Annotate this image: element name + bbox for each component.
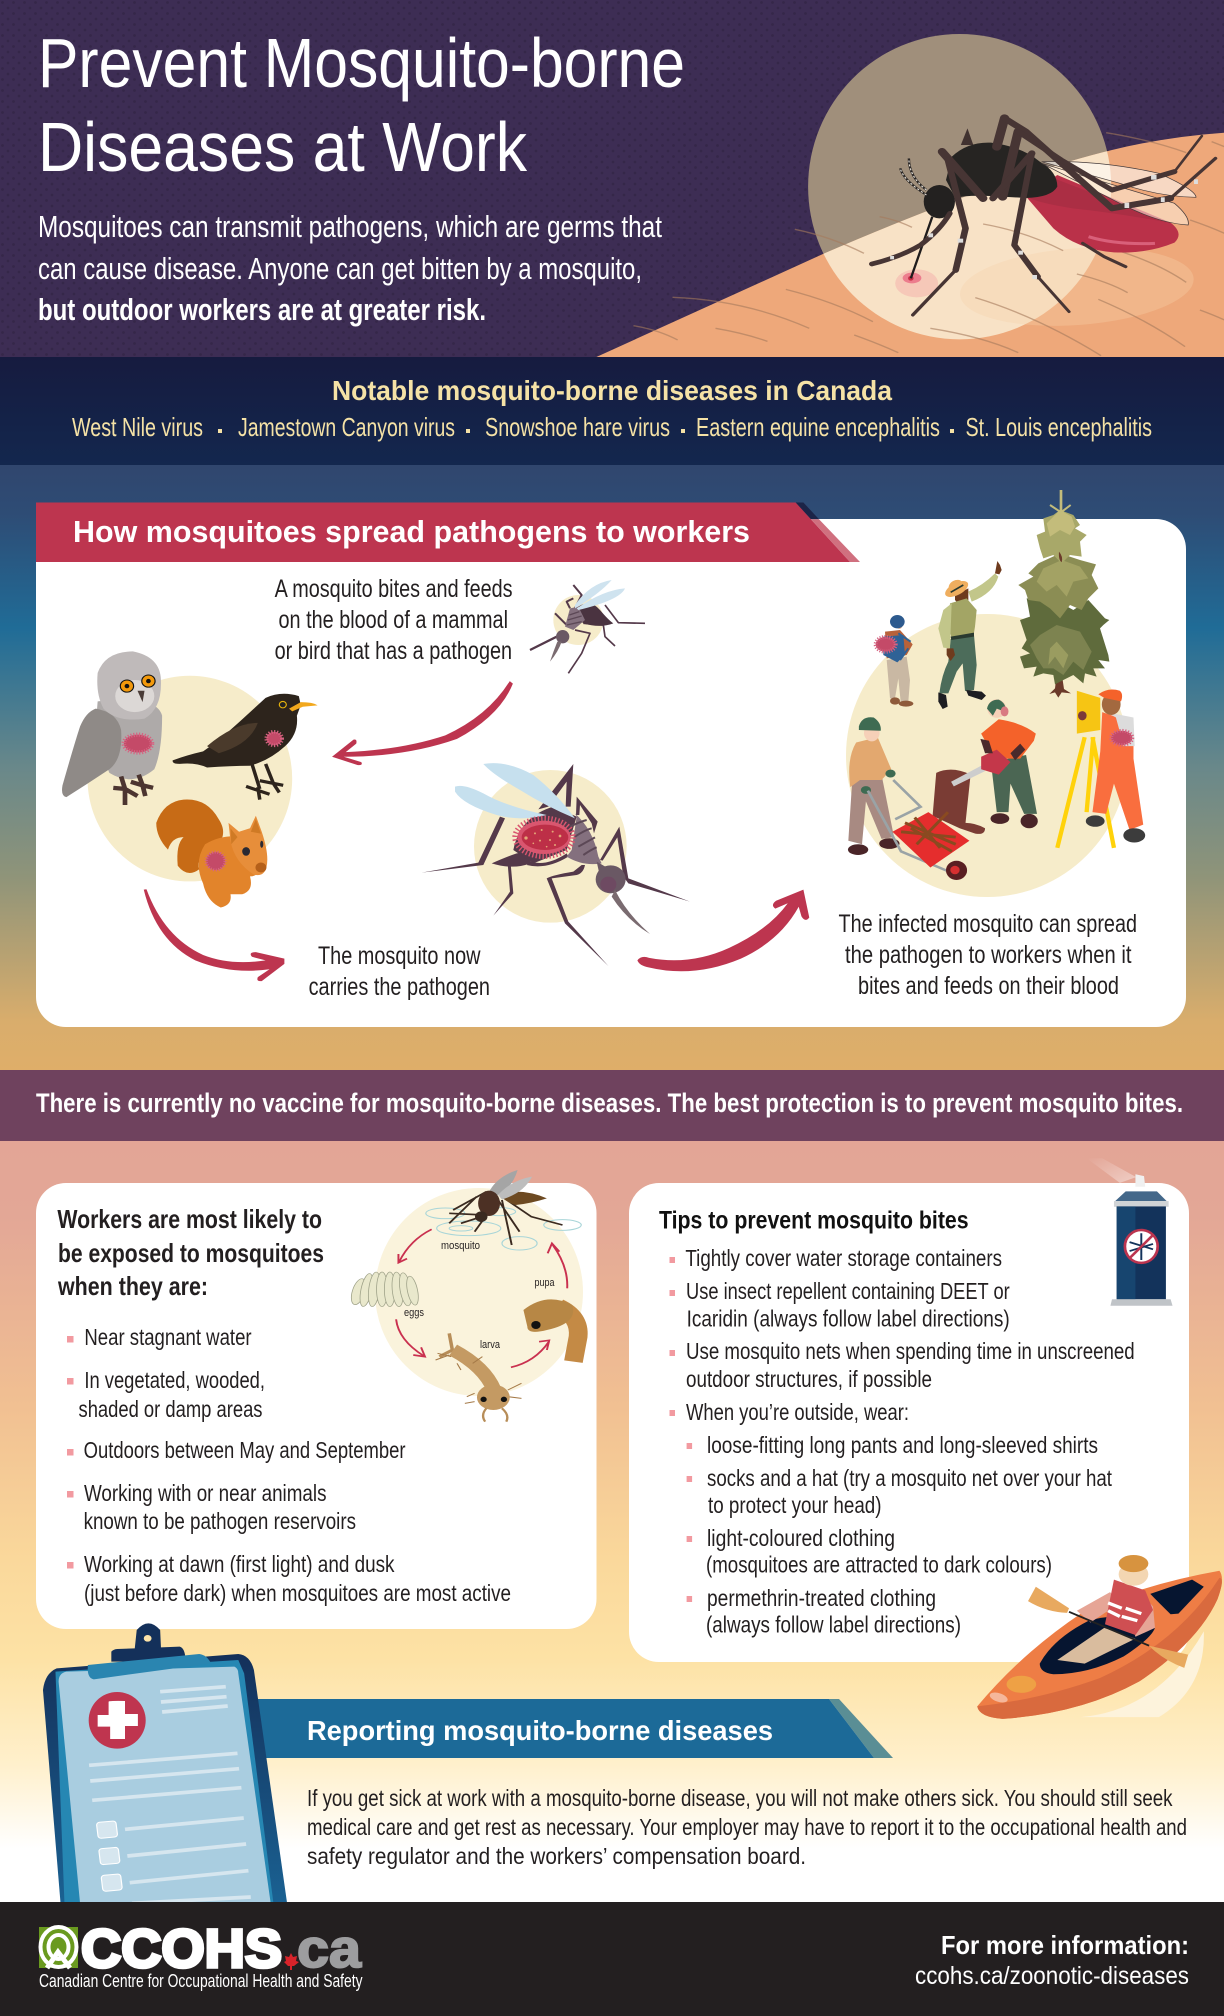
tips list: light-coloured clothing bbox=[707, 1525, 895, 1551]
icon: repellent spray can bbox=[1087, 1158, 1173, 1306]
step 1 text: A mosquito bites and feeds bbox=[275, 575, 513, 603]
step 3 text: bites and feeds on their blood bbox=[858, 972, 1119, 1000]
section: reporting mosquito-borne diseases bbox=[43, 1623, 1187, 1903]
exposure list: Near stagnant water bbox=[84, 1324, 252, 1350]
panel heading: Tips to prevent mosquito bites bbox=[659, 1207, 969, 1235]
icon: worker with wheelbarrow bbox=[848, 717, 969, 880]
tips list bbox=[670, 1245, 1135, 1638]
logo: CCOHS.ca: ca bbox=[297, 1919, 362, 1979]
icon: mosquito carrying pathogen bbox=[422, 763, 690, 966]
icon: pupa bbox=[523, 1299, 578, 1362]
logo: CCOHS.ca bbox=[39, 1919, 363, 1991]
illustration: mosquito life cycle: eggs bbox=[404, 1307, 424, 1319]
exposure list bbox=[67, 1324, 511, 1606]
icon: blackbird bbox=[173, 694, 318, 800]
step 3 text bbox=[838, 910, 1137, 1000]
arrow: mosquito to workers bbox=[637, 890, 809, 971]
icon: small mosquito feeding bbox=[530, 580, 645, 673]
more information bbox=[915, 1930, 1189, 1990]
intro text: but outdoor workers are at greater risk. bbox=[38, 292, 486, 327]
logo: CCOHS.ca: CCOHS bbox=[81, 1919, 282, 1979]
illustration: workers outdoors bbox=[846, 490, 1145, 897]
intro text: can cause disease. Anyone can get bitten by a mosquito, bbox=[38, 251, 642, 286]
tips list: permethrin-treated clothing bbox=[707, 1585, 936, 1611]
arrow: mosquito to animals bbox=[332, 681, 513, 765]
logo: CCOHS.ca: Canadian Centre for Occupational Health and Safety bbox=[39, 1970, 363, 1991]
illustration: mosquito life cycle bbox=[349, 1170, 583, 1422]
exposure list: shaded or damp areas bbox=[78, 1396, 262, 1422]
title: Prevent Mosquito-borne bbox=[38, 24, 685, 102]
tips list: Use mosquito nets when spending time in unscreened bbox=[686, 1338, 1135, 1364]
tips list: to protect your head) bbox=[708, 1492, 882, 1518]
exposure list: known to be pathogen reservoirs bbox=[84, 1508, 356, 1534]
tips list: Tightly cover water storage containers bbox=[685, 1245, 1002, 1271]
tips list: (always follow label directions) bbox=[706, 1612, 961, 1638]
tips list: loose-fitting long pants and long-sleeved shirts bbox=[707, 1432, 1098, 1458]
tips list: Icaridin (always follow label directions) bbox=[687, 1306, 1010, 1332]
more information: ccohs.ca/zoonotic-diseases bbox=[915, 1962, 1189, 1990]
exposure list: Working at dawn (first light) and dusk bbox=[84, 1551, 395, 1577]
disease list bbox=[72, 412, 1152, 442]
icon: larva bbox=[436, 1333, 521, 1422]
exposure list: Working with or near animals bbox=[84, 1480, 326, 1506]
panel: workers most likely to be exposed bbox=[36, 1170, 596, 1629]
more information: For more information: bbox=[941, 1930, 1189, 1960]
illustration: mosquito life cycle: larva bbox=[480, 1339, 501, 1351]
illustration: mosquito life cycle: pupa bbox=[534, 1277, 555, 1289]
illustration: mosquito life cycle: mosquito bbox=[441, 1240, 480, 1252]
icon: surveyor with tripod bbox=[1057, 690, 1145, 848]
step 2 text: The mosquito now bbox=[318, 942, 481, 970]
icon: owl bbox=[62, 651, 162, 805]
disease list: West Nile virus bbox=[72, 412, 203, 442]
page background bbox=[0, 465, 1224, 1902]
band: notable diseases in Canada bbox=[0, 357, 1224, 465]
title bbox=[38, 24, 685, 186]
tips list: outdoor structures, if possible bbox=[686, 1366, 932, 1392]
panel heading: Workers are most likely to bbox=[57, 1204, 322, 1234]
panel heading bbox=[57, 1204, 324, 1301]
step 2 text: carries the pathogen bbox=[309, 973, 490, 1001]
step 3 text: The infected mosquito can spread bbox=[838, 910, 1137, 938]
step 1 text: on the blood of a mammal bbox=[278, 606, 508, 634]
reporting text bbox=[307, 1785, 1187, 1869]
exposure list: (just before dark) when mosquitoes are most active bbox=[84, 1580, 511, 1606]
step 2 text bbox=[309, 942, 490, 1001]
exposure list: Outdoors between May and September bbox=[84, 1437, 406, 1463]
exposure list: In vegetated, wooded, bbox=[84, 1367, 265, 1393]
disease list: Eastern equine encephalitis bbox=[696, 412, 940, 442]
heading ribbon bbox=[36, 502, 860, 562]
illustration: mosquito biting skin bbox=[596, 34, 1224, 357]
icon: squirrel bbox=[156, 800, 267, 907]
panel heading: when they are: bbox=[57, 1271, 208, 1301]
arrow: animals to mosquito bbox=[144, 889, 284, 981]
ribbon heading bbox=[250, 1699, 893, 1758]
disease list: St. Louis encephalitis bbox=[966, 412, 1152, 442]
tips list: (mosquitoes are attracted to dark colours) bbox=[706, 1552, 1052, 1578]
illustration: person in kayak bbox=[977, 1555, 1222, 1719]
panel: how mosquitoes spread pathogens bbox=[36, 490, 1186, 1027]
icon: clipboard bbox=[43, 1623, 287, 1903]
band heading: Notable mosquito-borne diseases in Canada bbox=[332, 375, 892, 406]
title: Diseases at Work bbox=[38, 108, 528, 186]
panel heading: be exposed to mosquitoes bbox=[58, 1238, 324, 1268]
icon: hiker with backpack bbox=[876, 615, 913, 707]
icon: eggs bbox=[349, 1272, 420, 1307]
tips list: Use insect repellent containing DEET or bbox=[686, 1278, 1010, 1304]
step 1 text: or bird that has a pathogen bbox=[275, 637, 512, 665]
band: no vaccine message bbox=[0, 1070, 1224, 1141]
intro text bbox=[38, 209, 662, 327]
disease list: Jamestown Canyon virus bbox=[238, 412, 455, 442]
intro text: Mosquitoes can transmit pathogens, which are germs that bbox=[38, 209, 662, 244]
header panel bbox=[0, 0, 1224, 357]
step 3 text: the pathogen to workers when it bbox=[845, 941, 1132, 969]
tips list: socks and a hat (try a mosquito net over your hat bbox=[707, 1465, 1112, 1491]
heading ribbon: How mosquitoes spread pathogens to workers bbox=[73, 514, 750, 549]
reporting text: safety regulator and the workers’ compensation board. bbox=[307, 1843, 806, 1869]
step 1 text bbox=[275, 575, 513, 665]
disease list: Snowshoe hare virus bbox=[485, 412, 670, 442]
illustration: infected animals bbox=[62, 651, 318, 907]
life-cycle arrows bbox=[396, 1229, 567, 1367]
ribbon heading: Reporting mosquito-borne diseases bbox=[307, 1715, 773, 1746]
icon: ranger bbox=[938, 561, 1002, 709]
footer bbox=[0, 1902, 1224, 2016]
panel: tips to prevent bites bbox=[629, 1158, 1189, 1662]
icon: worker with chainsaw bbox=[951, 699, 1038, 828]
tips list: When you’re outside, wear: bbox=[686, 1399, 909, 1425]
icon: stump bbox=[932, 770, 985, 834]
icon: tree bbox=[1018, 490, 1109, 698]
